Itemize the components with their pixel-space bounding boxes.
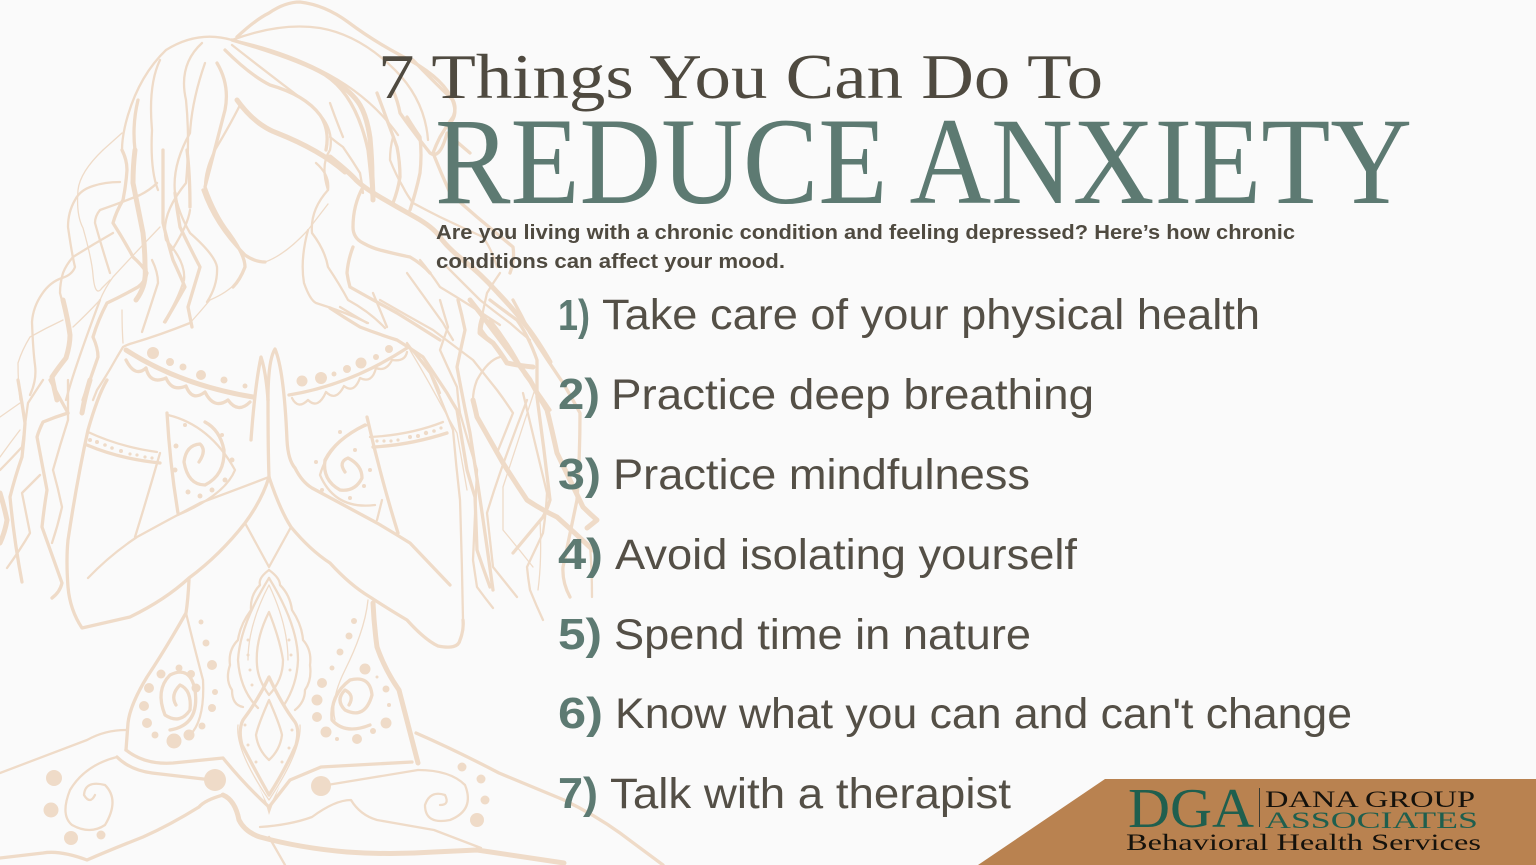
item 7: 7) bbox=[558, 769, 598, 818]
shoulders and sleeve bands bbox=[87, 346, 447, 515]
logo: Associates: ASSOCIATES bbox=[1265, 808, 1478, 833]
item 6: Know what you can and can't change bbox=[615, 690, 1352, 738]
item 2: 2) bbox=[558, 370, 600, 419]
logo: DGA letters: DGA bbox=[1128, 778, 1255, 840]
praying hands and arms bbox=[67, 349, 463, 647]
item 3: 3) bbox=[558, 450, 601, 499]
item 3: Practice mindfulness bbox=[613, 451, 1030, 499]
collar with scallops and dots bbox=[126, 345, 407, 408]
logo divider bbox=[1259, 788, 1260, 827]
logo: Dana Group: DANA GROUP bbox=[1265, 787, 1475, 812]
belly spirals and dots bbox=[139, 618, 392, 748]
face and neck outline bbox=[203, 163, 385, 328]
intro paragraph bbox=[436, 222, 1295, 273]
item 5: 5) bbox=[558, 610, 602, 659]
item 4: Avoid isolating yourself bbox=[615, 531, 1078, 579]
centre pendant ornament bbox=[228, 570, 310, 800]
item 1: Take care of your physical health bbox=[602, 291, 1260, 339]
numbered list bbox=[558, 291, 1352, 818]
item 2: Practice deep breathing bbox=[611, 371, 1094, 419]
item 4: 4) bbox=[558, 530, 603, 579]
woman's hair strands bbox=[0, 2, 597, 620]
illustration: meditating woman line art bbox=[0, 2, 663, 865]
item 5: Spend time in nature bbox=[614, 611, 1031, 659]
logo: tagline: Behavioral Health Services bbox=[1126, 830, 1481, 855]
intro paragraph: conditions can affect your mood. bbox=[436, 251, 785, 273]
item 7: Talk with a therapist bbox=[610, 770, 1011, 818]
torso and legs outlines bbox=[0, 580, 663, 865]
left-side hair bbox=[0, 150, 200, 598]
item 1: 1) bbox=[558, 291, 590, 340]
intro paragraph: Are you living with a chronic condition and feeling depressed? Here’s how chronic bbox=[436, 222, 1295, 244]
logo banner bbox=[978, 778, 1536, 865]
title line: 7 Things You Can Do To bbox=[378, 41, 1103, 112]
item 6: 6) bbox=[558, 689, 603, 738]
banner shape bbox=[978, 779, 1536, 865]
right-side hair bbox=[330, 60, 597, 620]
chest spirals bbox=[172, 422, 372, 500]
main heading: REDUCE ANXIETY bbox=[435, 93, 1412, 230]
